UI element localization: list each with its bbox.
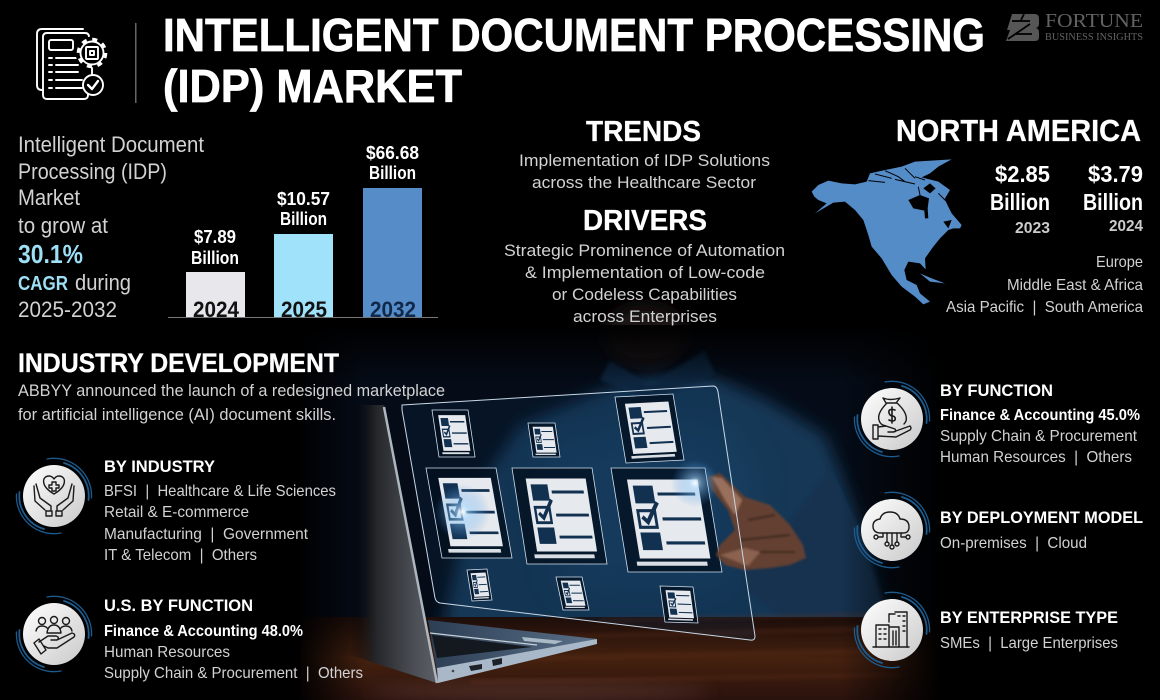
map: North America [812, 159, 962, 304]
industry development: ABBYY announced the launch of a redesigned marketplace [18, 381, 445, 400]
industry development: for artificial intelligence (AI) document skills. [18, 405, 336, 424]
industry development [18, 348, 445, 424]
by deployment model [940, 508, 1143, 552]
drivers: DRIVERS [583, 205, 707, 237]
other regions: Asia Pacific | South America [946, 299, 1143, 316]
by function: BY FUNCTION [940, 381, 1053, 400]
drivers: across Enterprises [573, 307, 717, 326]
market growth text: to grow at [18, 213, 108, 238]
bar chart: market size: 2025 [281, 297, 327, 322]
North America market values: $3.79 [1088, 161, 1143, 187]
market growth text: CAGR [18, 273, 68, 295]
bar chart: market size: $66.68 [366, 143, 419, 163]
title: INTELLIGENT DOCUMENT PROCESSING [163, 9, 985, 61]
drivers: Strategic Prominence of Automation [504, 241, 785, 260]
trends [519, 116, 770, 192]
by deployment model: On-premises | Cloud [940, 535, 1087, 552]
icon: money bag on hand [854, 381, 930, 457]
market growth text: Intelligent Document [18, 132, 204, 157]
other regions: Europe [1096, 254, 1143, 271]
bar chart: market size: $7.89 [194, 227, 236, 247]
icon: hand holding people [16, 596, 92, 672]
title: (IDP) MARKET [163, 60, 462, 112]
icon: city buildings [854, 592, 930, 668]
North America market values [990, 161, 1143, 237]
header icon: document with gear and check [37, 29, 108, 99]
laptop [350, 405, 597, 683]
U.S. by function: Finance & Accounting 48.0% [104, 623, 303, 640]
U.S. by function: Human Resources [104, 644, 230, 661]
background photo: person, desk and laptop [300, 305, 940, 700]
drivers [504, 205, 785, 326]
North America market values: Billion [990, 189, 1050, 215]
photo edge fades [295, 325, 1160, 700]
virtual document panel [402, 386, 755, 640]
other regions [946, 254, 1143, 316]
by function [940, 381, 1140, 466]
bar chart: market size [168, 143, 438, 322]
by enterprise type: BY ENTERPRISE TYPE [940, 608, 1118, 627]
by function: Supply Chain & Procurement [940, 428, 1138, 445]
by industry: Retail & E-commerce [104, 504, 249, 521]
trends: across the Healthcare Sector [532, 173, 756, 192]
bar chart: market size: Billion [369, 163, 416, 183]
North America market values: 2023 [1015, 220, 1050, 237]
market growth text: Market [18, 185, 80, 210]
by industry: BY INDUSTRY [104, 457, 216, 476]
hand pointing at panel [708, 473, 806, 570]
bar chart: market size: 2024 [193, 297, 240, 322]
market growth text: Processing (IDP) [18, 159, 167, 184]
by industry: BFSI | Healthcare & Life Sciences [104, 483, 336, 500]
by function: Finance & Accounting 45.0% [940, 407, 1140, 424]
by enterprise type [940, 608, 1118, 652]
drivers: & Implementation of Low-code [525, 263, 765, 282]
title [163, 9, 985, 112]
by industry [104, 457, 336, 564]
bar chart: market size: Billion [280, 209, 327, 229]
industry development: INDUSTRY DEVELOPMENT [18, 348, 339, 378]
by enterprise type: SMEs | Large Enterprises [940, 635, 1118, 652]
North America market values: 2024 [1109, 218, 1143, 235]
North America market values: Billion [1083, 189, 1143, 215]
market growth text: 30.1% [18, 239, 83, 269]
bar chart: market size: $10.57 [277, 189, 330, 209]
other regions: Middle East & Africa [1007, 277, 1143, 294]
icon: caring hands with heart [16, 458, 92, 534]
by industry: IT & Telecom | Others [104, 547, 257, 564]
regional heading: NORTH AMERICA [896, 113, 1141, 148]
icon: cloud network [854, 492, 930, 568]
North America market values: $2.85 [995, 161, 1050, 187]
market growth text: during [75, 270, 131, 295]
U.S. by function: Supply Chain & Procurement | Others [104, 665, 363, 682]
panel outline and glows [402, 386, 755, 640]
trends: TRENDS [586, 116, 701, 148]
by deployment model: BY DEPLOYMENT MODEL [940, 508, 1143, 527]
drivers: or Codeless Capabilities [552, 285, 737, 304]
bar chart: market size: Billion [191, 248, 239, 268]
trends: Implementation of IDP Solutions [519, 151, 770, 170]
header divider [135, 23, 136, 103]
bar chart: market size: 2032 [370, 297, 416, 322]
U.S. by function [104, 596, 363, 682]
by function: Human Resources | Others [940, 449, 1132, 466]
market growth text: 2025-2032 [18, 297, 117, 322]
logo: Fortune Business Insights [1006, 10, 1143, 43]
logo: Fortune Business Insights: BUSINESS INSIGHTS [1045, 32, 1143, 43]
market growth text [18, 132, 204, 322]
logo: Fortune Business Insights: FORTUNE [1045, 10, 1143, 32]
U.S. by function: U.S. BY FUNCTION [104, 596, 253, 615]
by industry: Manufacturing | Government [104, 526, 309, 543]
